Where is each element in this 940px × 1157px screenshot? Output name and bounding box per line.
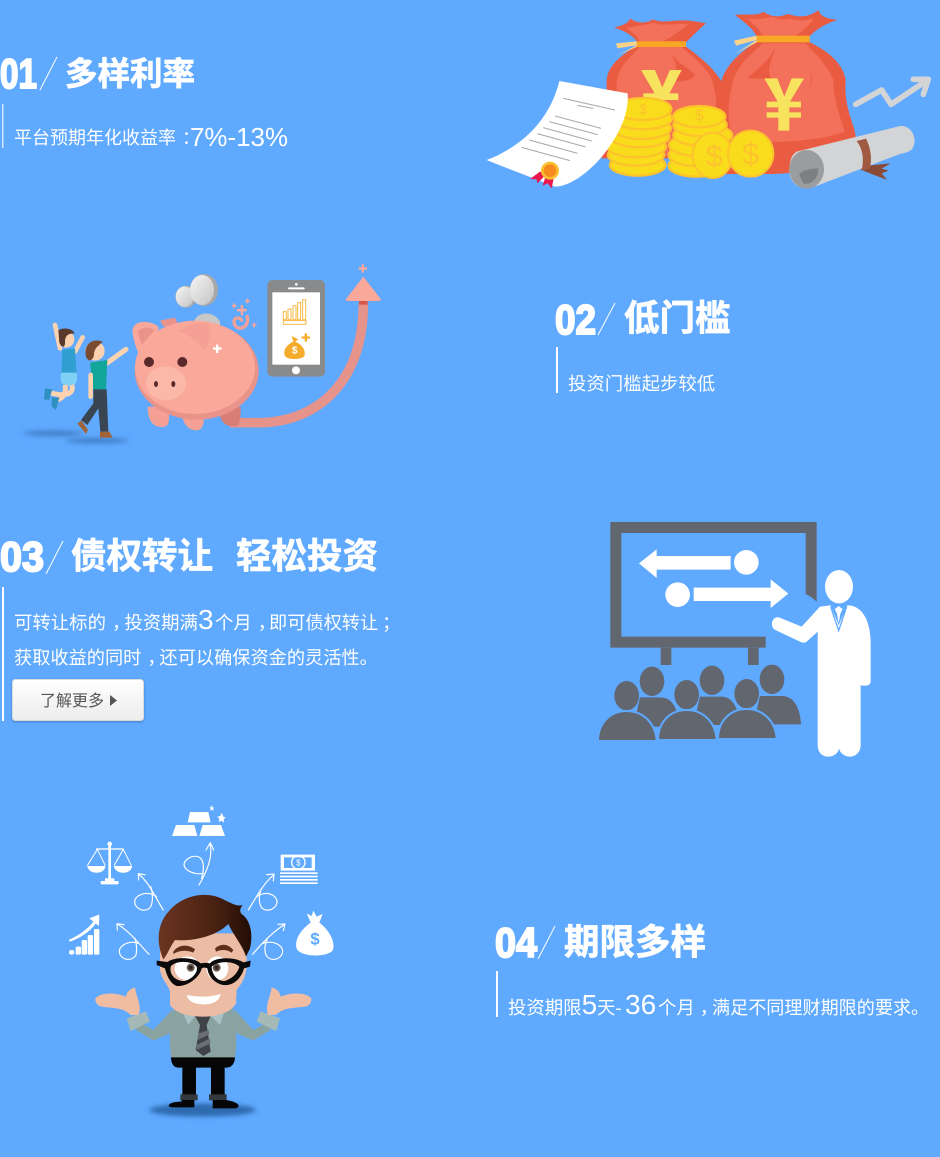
icon: rising chart [69,914,99,955]
section 01 text [0,48,288,152]
icon: growth arrow [230,264,381,423]
heading 01 [0,48,195,97]
description 04: 投资期限5 [508,989,597,1020]
illustration: thinking businessman with finance icons [69,805,334,1117]
icon: piggy bank [132,299,259,430]
icon: presenter [772,570,871,757]
description 03: 可转让标的 ，投资期满3 [14,604,214,635]
icon: contract with ribbon [487,81,628,188]
illustration: piggy bank, kids, phone and growth arrow [23,264,381,443]
button: learn more: 了解更多 [40,692,104,710]
icon: left coin stack [607,98,672,176]
accent bar 04 [496,971,498,1017]
heading 04: 04 [495,919,538,966]
curly arrows [117,843,285,959]
icon: businessman character [95,895,311,1117]
icon: growth arrow [856,79,928,104]
description 01: 平台预期年化收益率 ： [14,128,200,148]
icon: balance scale [87,842,132,884]
description 04: 36 [625,989,656,1020]
illustration: presenter and audience [598,522,871,757]
icon: banknote stack: $ [296,858,301,867]
shirt and tie [170,1006,236,1057]
icon: dollar coins: $ [742,137,759,171]
description 04: ， [700,997,718,1018]
section 02 text [555,290,731,394]
description 04: 个月 [658,997,695,1018]
icon: money bag: $ [310,930,320,949]
heading 02 [555,290,731,343]
accent bar 01 [2,104,4,148]
icon: right coin stack: $ [695,108,704,125]
icon: audience [598,665,801,741]
icon: banknote stack [280,855,318,884]
heading 03 [0,528,378,580]
heading 03: 03 [0,533,44,580]
legs and shoes [169,1057,239,1108]
icon: silver coins [175,274,220,328]
description 03: 获取收益的同时 ，还可以确保资金的灵活性。 [14,648,378,668]
heading 01: 01 [0,50,37,97]
icon: left money bag [602,18,722,158]
heading 04 [495,914,706,966]
description 03: ， [258,612,276,633]
icon: phone: $ [292,345,298,356]
heading 03: 轻松投资 [236,528,378,579]
description 01: 7%-13% [190,122,288,152]
heading 04: 期限多样 [564,914,706,965]
description 03: ； [382,613,400,633]
section 03 text [0,528,400,721]
icon: right coin stack [669,106,732,177]
description 04: 满足不同理财期限的要求。 [712,998,929,1018]
icon: transfer arrows [639,549,788,608]
arms and hands [95,987,311,1041]
illustration: money bags, coins, contract and scroll [487,10,928,189]
icon: right money bag [715,10,856,174]
heading 01: 多样利率 [65,48,195,95]
heading 02: 低门槛 [624,290,731,341]
icon: left coin stack: $ [638,101,648,118]
description 04: 天- [597,997,622,1018]
icon: dollar coins: $ [706,140,723,174]
button: learn more [12,680,144,720]
icon: rolled scroll [789,126,915,189]
icon: boy pointing [65,340,128,443]
description 03: 即可债权转让 [269,613,378,633]
accent bar 03 [2,587,4,721]
section 04 text [495,914,929,1020]
icon: gold bars [172,805,226,836]
icon: dollar coins [693,131,773,178]
accent bar 02 [556,347,558,393]
description 03 [14,604,400,668]
icon: girl jumping [23,325,83,436]
icon: money bag [296,911,334,955]
heading 03: 债权转让 [71,528,213,579]
description 03: 个月 [215,612,252,633]
icon: phone [267,280,325,377]
description 02: 投资门槛起步较低 [568,373,715,394]
icon: presentation board [610,522,817,665]
heading 02: 02 [555,296,596,343]
head and face [157,895,251,1017]
